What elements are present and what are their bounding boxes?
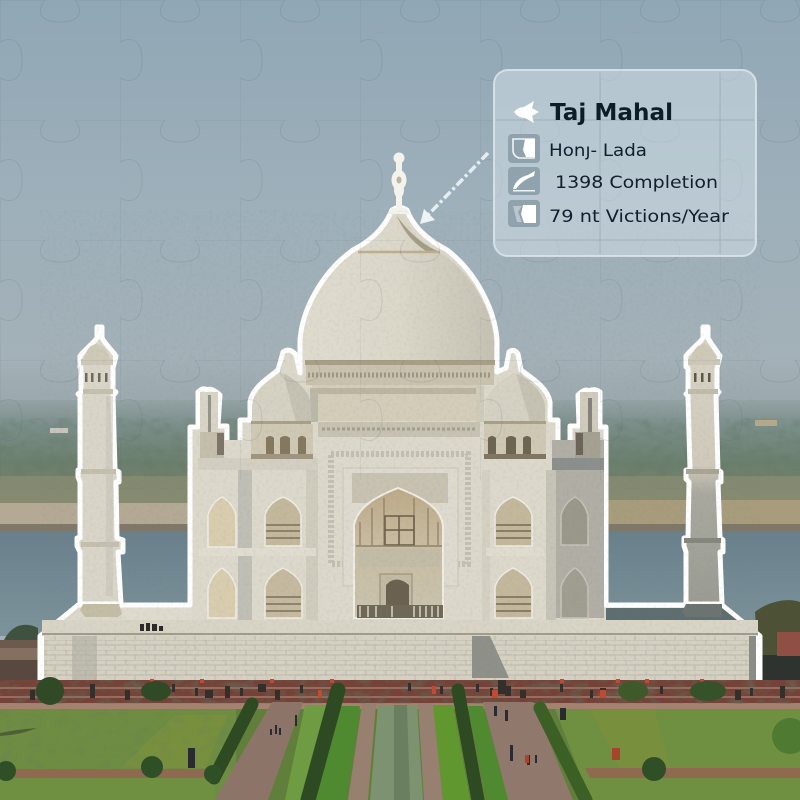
gardens: red sandstone terrace [0, 679, 800, 710]
building: main dome [303, 214, 494, 362]
building: left side dome and base [200, 373, 313, 459]
background: sandy river bank [0, 500, 800, 531]
building: plinth wall [40, 620, 760, 680]
background: left and right side trees [0, 600, 800, 682]
row: completion year: 1398 Completion [555, 173, 718, 192]
heading: Taj Mahal: Taj Mahal [550, 100, 673, 126]
row: location [508, 134, 647, 163]
minaret: right [682, 327, 723, 617]
gardens: left lawn [0, 709, 236, 800]
row: visitors per year: 79 nt Victions/Year [549, 207, 729, 226]
overlay: puzzle piece seams over sky [0, 0, 800, 480]
background: river [0, 531, 800, 636]
building: beaded finial [388, 152, 410, 214]
building: right facade bays [482, 470, 588, 620]
texture: stone grain over building [40, 210, 760, 680]
building: central facade with iwan arch [318, 437, 480, 621]
gardens: hedges and shrubs [0, 677, 800, 800]
callout arrow [420, 153, 488, 224]
panel: info card [494, 70, 756, 256]
background: far bank with trees [0, 400, 800, 505]
background: sky [0, 0, 800, 420]
gardens: base ground [0, 709, 800, 800]
building: ornate drum [305, 360, 495, 437]
icon: title landmark glyph [514, 101, 539, 123]
gardens: visitors [188, 706, 620, 768]
building: left facade bays [198, 470, 318, 620]
gardens: central walkways and canal [215, 702, 573, 800]
minaret: left [77, 327, 123, 617]
row: location: Honȷ- Lada [549, 141, 647, 160]
gardens: right lawn [555, 709, 800, 800]
row: visitors per year [508, 200, 729, 227]
row: completion year [508, 167, 718, 195]
building: white cut-out outline and marble body [40, 208, 760, 680]
building: right side dome and base [484, 373, 600, 459]
